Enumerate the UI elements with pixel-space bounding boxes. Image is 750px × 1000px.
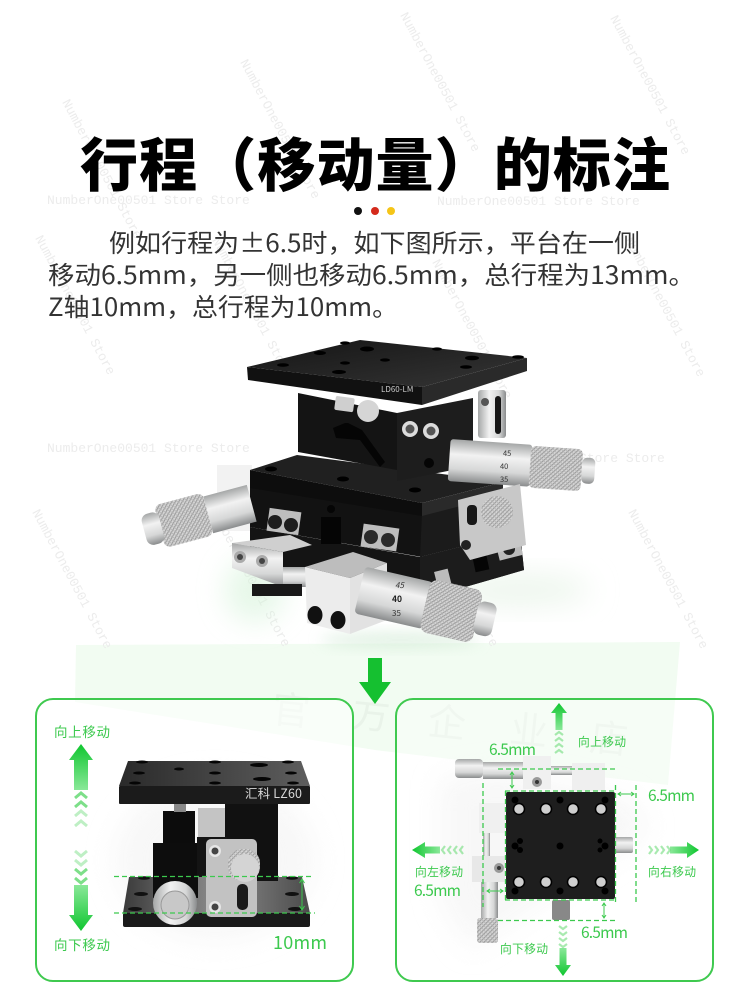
panel: Z-axis travel bbox=[36, 699, 353, 981]
label: 6.5mm top: 6.5mm bbox=[489, 738, 536, 760]
watermarks: NumberOne00501 Store bbox=[428, 257, 515, 402]
watermarks: NumberOne00501 Store Store bbox=[437, 194, 640, 209]
watermarks: NumberOne00501 Store bbox=[414, 505, 501, 650]
watermarks: NumberOne00501 Store Store bbox=[462, 451, 665, 466]
label: move down: 向下移动 bbox=[54, 934, 110, 954]
front micrometer bbox=[354, 564, 500, 647]
title: 行程（移动量）的标注 bbox=[80, 119, 670, 203]
upper body and side block bbox=[298, 390, 506, 481]
right micrometer: 45 bbox=[503, 448, 511, 459]
front micrometer: 40 bbox=[392, 593, 402, 605]
left micrometer bbox=[139, 481, 257, 552]
watermarks: NumberOne00501 Store bbox=[31, 233, 118, 378]
dashed travel guides bbox=[483, 769, 636, 920]
arrow: down bbox=[359, 658, 391, 704]
watermarks: NumberOne00501 Store bbox=[621, 235, 708, 380]
right micrometer bbox=[448, 439, 596, 492]
watermarks: NumberOne00501 Store Store bbox=[47, 441, 250, 456]
band watermark characters: 业 bbox=[507, 698, 551, 757]
lower plate bbox=[250, 527, 524, 600]
background band: pale green wash bbox=[75, 642, 680, 785]
model label: 汇科 LZ60 bbox=[245, 783, 302, 802]
watermarks: NumberOne00501 Store Store bbox=[47, 193, 250, 208]
top plate bbox=[506, 792, 615, 899]
band watermark characters: 方 bbox=[350, 682, 393, 741]
watermarks: NumberOne00501 Store bbox=[206, 505, 293, 650]
label: 6.5mm left: 6.5mm bbox=[414, 879, 461, 901]
left micrometer bbox=[472, 803, 505, 943]
product photo: XYZ stage with micrometers bbox=[139, 340, 596, 648]
label: 10mm: 10mm bbox=[273, 929, 327, 955]
watermarks: NumberOne00501 Store bbox=[396, 10, 483, 155]
description text bbox=[48, 224, 695, 324]
watermarks: NumberOne00501 Store bbox=[58, 97, 145, 242]
arrow: left bbox=[412, 842, 463, 858]
middle slide block bbox=[250, 455, 520, 557]
front micrometer block bbox=[305, 552, 387, 634]
plate holes bbox=[512, 796, 608, 894]
side knobs bbox=[552, 837, 633, 920]
watermarks bbox=[28, 10, 711, 652]
arrow: up bbox=[69, 744, 93, 826]
label: move left: 向左移动 bbox=[415, 863, 463, 880]
label: move down: 向下移动 bbox=[500, 940, 548, 957]
panel: XY travel bbox=[396, 699, 713, 981]
arrow: up bbox=[551, 703, 567, 753]
panel frame bbox=[396, 699, 713, 981]
watermarks: NumberOne00501 Store bbox=[236, 57, 323, 202]
description text: 例如行程为±6.5时，如下图所示，平台在一侧 bbox=[109, 224, 640, 260]
description text: Z轴10mm，总行程为10mm。 bbox=[48, 288, 398, 324]
top micrometer bbox=[455, 756, 605, 791]
panel frame bbox=[36, 699, 353, 981]
small left block bbox=[232, 535, 312, 596]
watermarks: NumberOne00501 Store bbox=[208, 235, 295, 380]
right micrometer: 35 bbox=[500, 474, 508, 485]
top plate bbox=[247, 340, 527, 405]
right side bracket and knob bbox=[458, 484, 526, 560]
label: 6.5mm bottom: 6.5mm bbox=[581, 921, 628, 943]
band watermark characters: 官 bbox=[269, 678, 313, 737]
plate screws bbox=[514, 804, 606, 888]
right micrometer: 40 bbox=[500, 461, 508, 472]
watermarks: NumberOne00501 Store bbox=[624, 507, 711, 652]
front micrometer: 35 bbox=[392, 608, 401, 619]
description text: 移动6.5mm，另一侧也移动6.5mm，总行程为13mm。 bbox=[48, 256, 695, 292]
watermarks: NumberOne00501 Store bbox=[28, 507, 115, 652]
measure lines bbox=[114, 876, 315, 913]
arrow: down bbox=[555, 926, 571, 976]
arrow: right bbox=[649, 842, 699, 858]
left micrometer rear block bbox=[217, 465, 252, 531]
watermarks: NumberOne00501 Store bbox=[606, 13, 693, 158]
decorative dots bbox=[354, 207, 395, 215]
silver bracket bbox=[206, 839, 257, 917]
Z stage photo bbox=[115, 760, 315, 940]
soft shadows bbox=[225, 558, 590, 648]
label: move right: 向右移动 bbox=[648, 863, 696, 880]
XY stage top view bbox=[440, 756, 650, 950]
band watermark characters: 店 bbox=[587, 706, 631, 765]
label: move up: 向上移动 bbox=[54, 721, 110, 741]
band watermark characters: 企 bbox=[425, 690, 469, 749]
label: 6.5mm right: 6.5mm bbox=[648, 784, 695, 806]
label: move up: 向上移动 bbox=[578, 733, 626, 750]
model label: LD60-LM bbox=[381, 384, 413, 395]
band watermark characters bbox=[269, 678, 631, 765]
front micrometer: 45 bbox=[395, 580, 405, 591]
arrow: down bbox=[69, 851, 93, 931]
